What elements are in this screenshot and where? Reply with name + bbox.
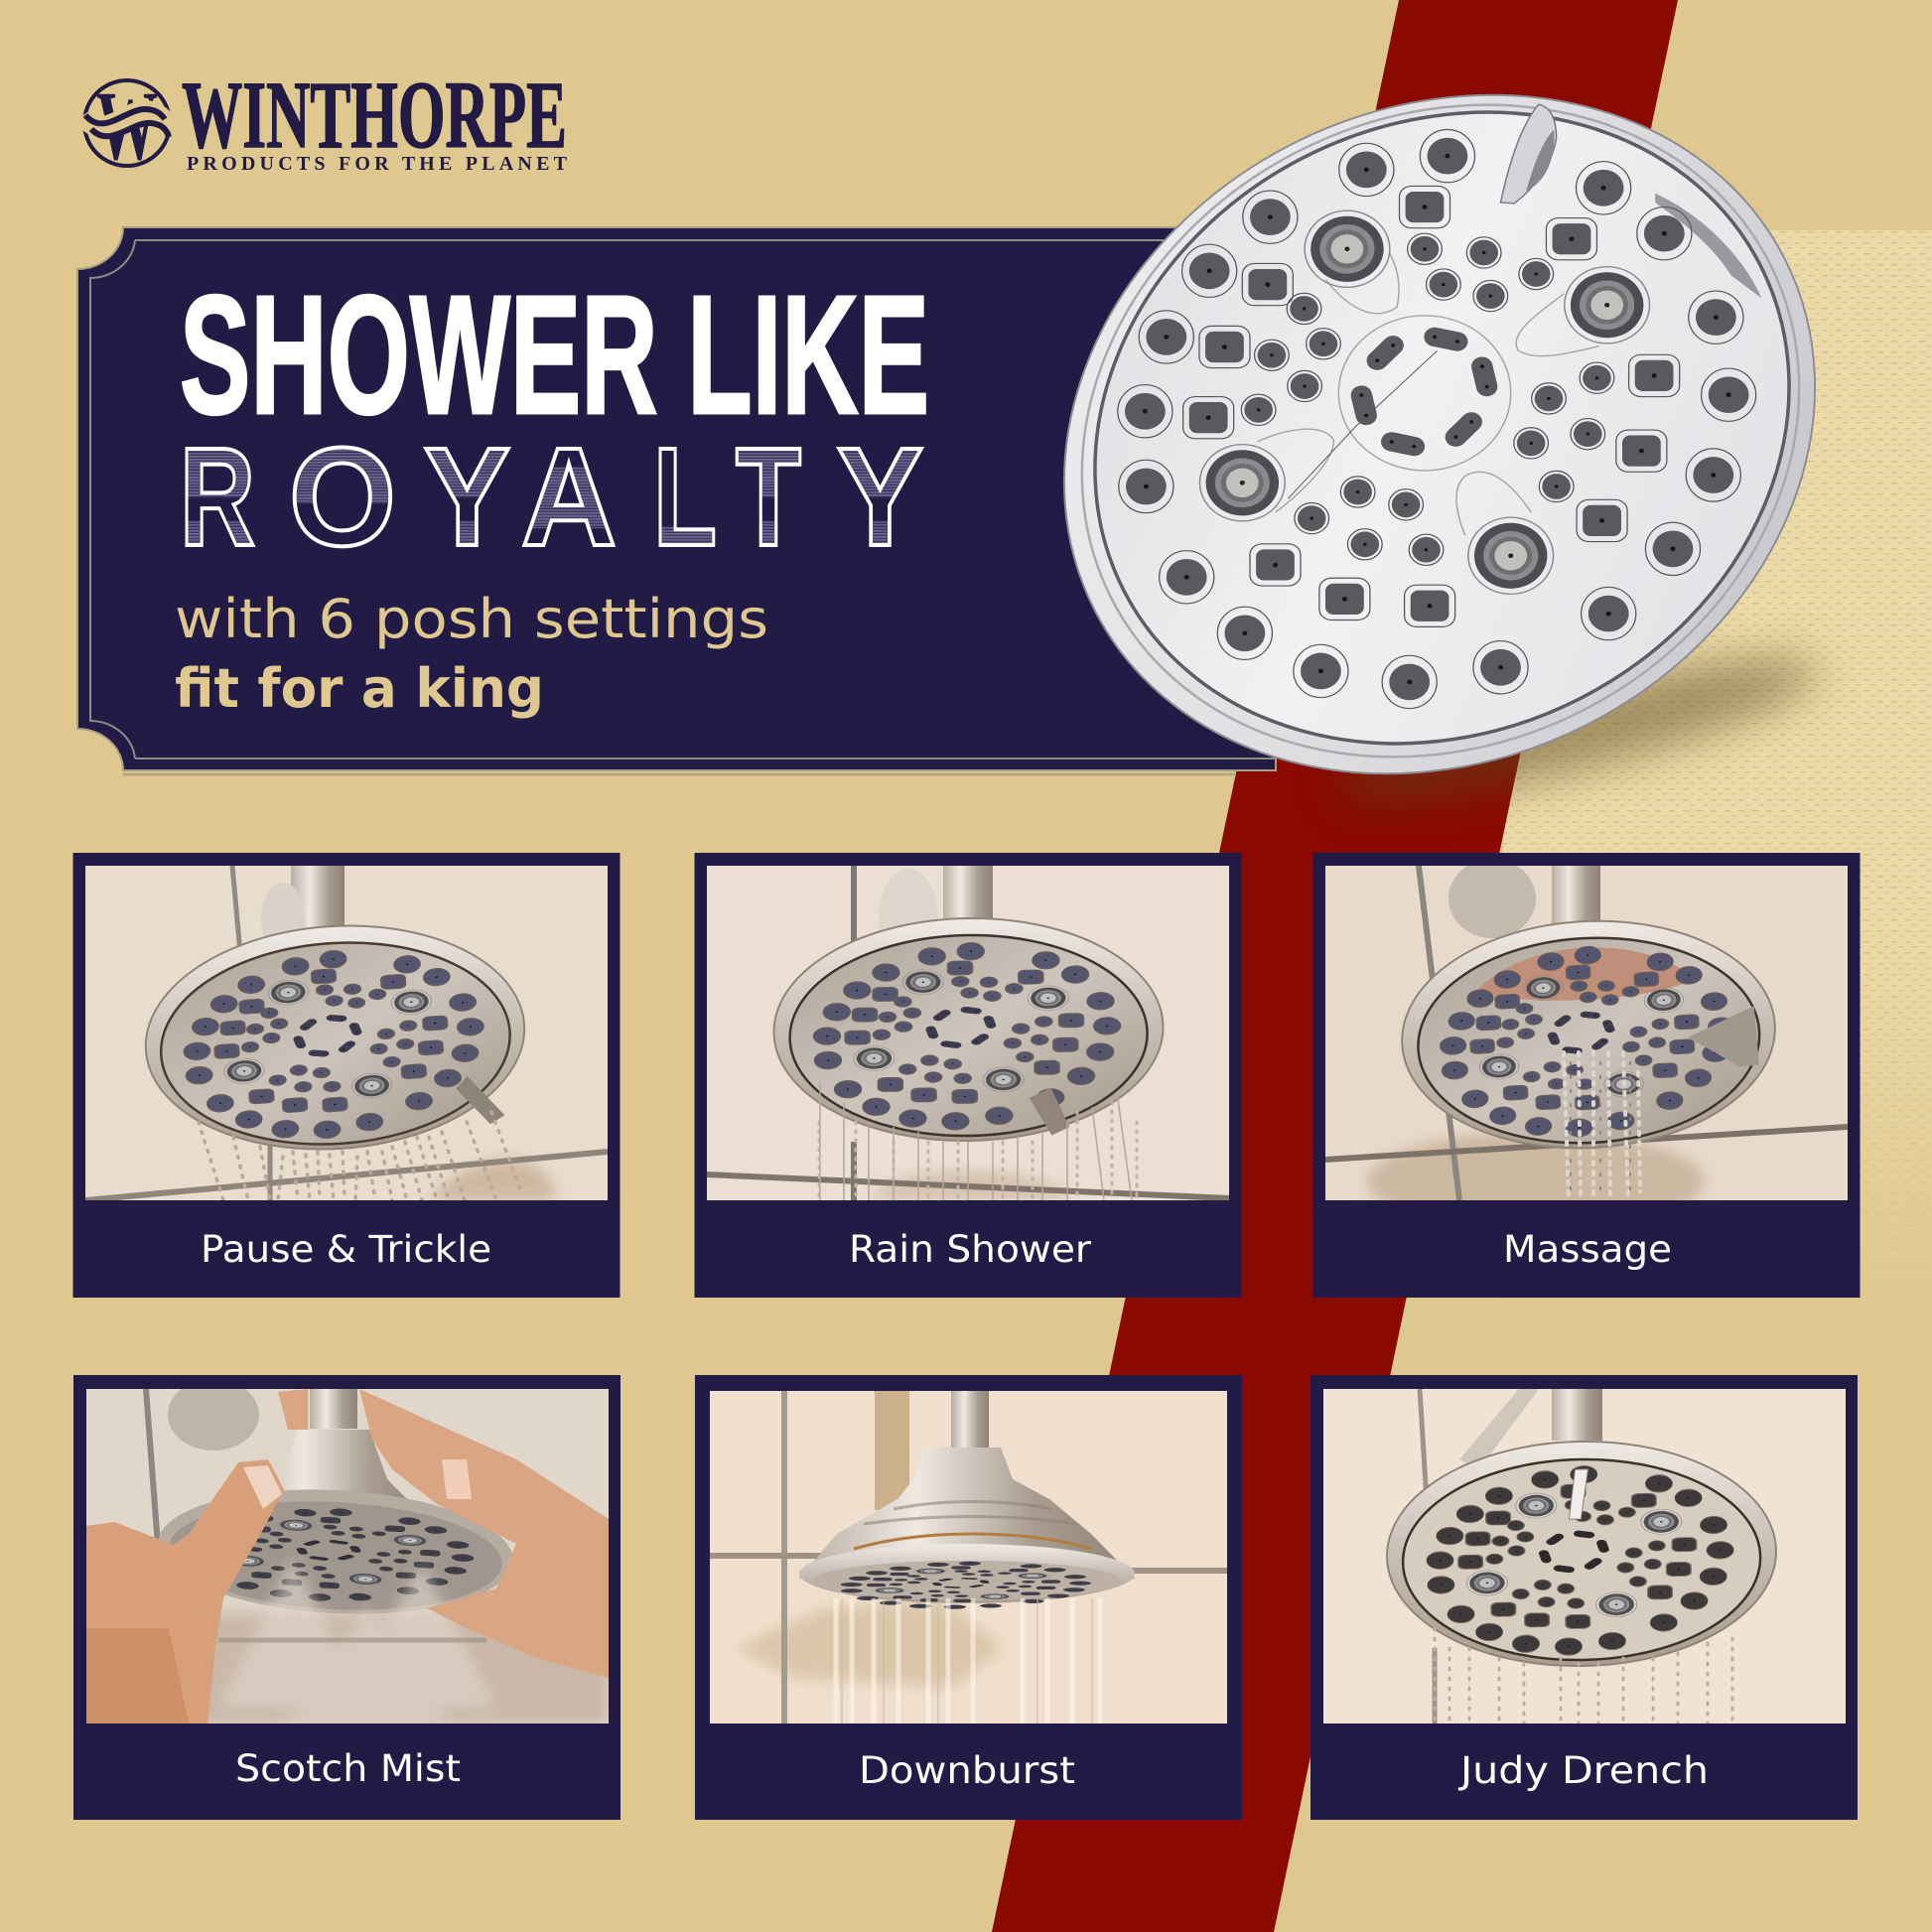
label: Rain Shower xyxy=(849,1228,1092,1271)
heading: royalty: L xyxy=(653,418,717,575)
heading: royalty xyxy=(180,418,923,575)
burlap texture panel xyxy=(1503,230,1932,1187)
panel: Massage xyxy=(1312,853,1861,1298)
panel: Judy Drench xyxy=(1311,1375,1858,1820)
reflection xyxy=(1655,194,1761,298)
heading: royalty: Y xyxy=(837,418,923,575)
center ring and seams xyxy=(1258,252,1599,535)
photo: pause and trickle xyxy=(85,866,608,1200)
heading: royalty: Y xyxy=(424,418,510,575)
wordmark: WINTHORPE xyxy=(182,62,567,168)
panel: Scotch Mist xyxy=(73,1375,621,1820)
panel: Downburst xyxy=(695,1375,1242,1820)
icon: logo emblem xyxy=(83,70,171,181)
product: chrome shower head xyxy=(947,0,1932,900)
tagline: PRODUCTS FOR THE PLANET xyxy=(187,153,568,175)
panel: headline banner xyxy=(77,227,1276,774)
subheading: with 6 posh settings xyxy=(175,588,768,650)
label: Massage xyxy=(1503,1228,1672,1271)
shadow under shower head xyxy=(1328,631,1829,828)
heading: royalty: R xyxy=(180,418,255,575)
heading: shower like: SHOWER LIKE xyxy=(180,261,929,450)
panel: Pause & Trickle xyxy=(73,853,620,1298)
subheading: fit for a king xyxy=(175,657,544,720)
nozzles xyxy=(1118,130,1756,709)
label: Pause & Trickle xyxy=(201,1228,491,1271)
panel: Rain Shower xyxy=(695,853,1241,1298)
photo: rain shower xyxy=(707,866,1229,1200)
photo: scotch mist xyxy=(86,1379,609,1724)
heading: royalty: T xyxy=(736,418,801,575)
photo: downburst xyxy=(710,1391,1227,1724)
chrome rim xyxy=(947,0,1932,900)
red diagonal stripe xyxy=(992,0,1678,1932)
heading: royalty: O xyxy=(289,418,396,575)
label: Scotch Mist xyxy=(235,1747,461,1790)
logo xyxy=(83,62,568,181)
heading: royalty: A xyxy=(521,418,617,575)
photo: judy drench xyxy=(1323,1389,1846,1724)
subheading xyxy=(175,588,768,720)
switch lever xyxy=(1501,104,1557,204)
photo: massage xyxy=(1325,866,1848,1200)
label: Downburst xyxy=(859,1749,1075,1792)
icon: logo emblem: W xyxy=(96,70,158,181)
label: Judy Drench xyxy=(1458,1749,1709,1792)
